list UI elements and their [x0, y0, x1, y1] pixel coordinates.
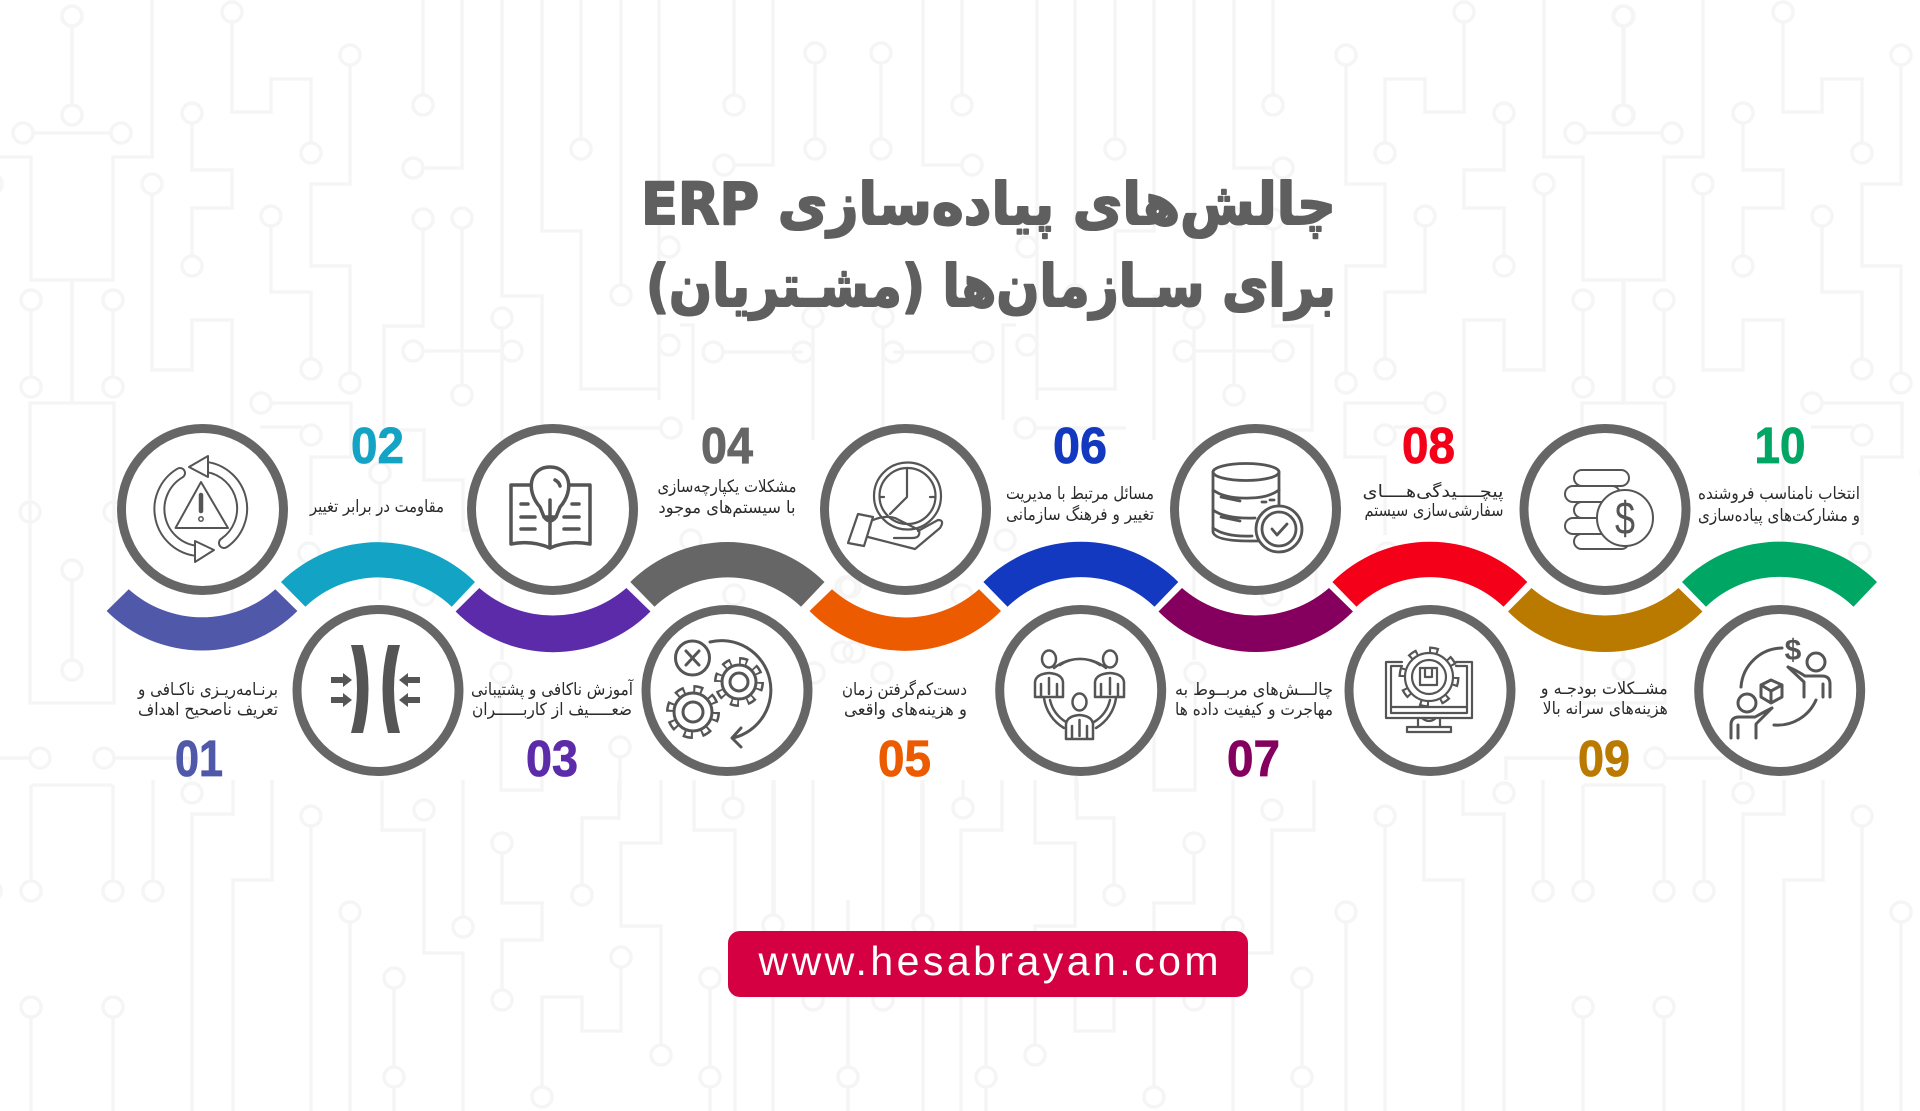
circle 08	[1349, 610, 1511, 772]
number 05: 05	[878, 730, 931, 787]
arc 04	[630, 542, 824, 607]
text 03	[471, 678, 634, 720]
arc 08	[1332, 542, 1527, 607]
text 07: چالـــش‌های مربــوط به	[1175, 680, 1333, 700]
title: برای سـازمان‌ها (مشـتریان)	[646, 252, 1336, 321]
step 01: planning	[107, 428, 297, 787]
number 04: 04	[701, 417, 754, 474]
text 01: برنـامه‌ریـزی ناکـافی و	[137, 680, 278, 700]
arc 03	[456, 588, 650, 652]
number 06: 06	[1053, 417, 1107, 474]
step 03: training	[456, 428, 650, 787]
text 09	[1540, 679, 1668, 719]
text 08: سفارشی‌سازی سیستم	[1364, 501, 1504, 521]
text 01: تعریف ناصحیح اهداف	[138, 700, 278, 720]
arc 06	[983, 542, 1178, 607]
circle 04	[646, 610, 808, 772]
website button: www.hesabrayan.com	[758, 938, 1218, 984]
circle 09	[1524, 428, 1686, 590]
text 05: و هزینه‌های واقعی	[844, 700, 967, 720]
arc 01	[107, 589, 297, 650]
icon: monitor with gear and box	[1386, 651, 1472, 732]
arc 09	[1508, 588, 1702, 652]
text 05: دست‌کم‌گرفتن زمان	[842, 679, 967, 700]
circle 05	[824, 428, 986, 590]
circle 07	[1174, 428, 1336, 590]
number 02: 02	[351, 417, 404, 474]
title	[641, 170, 1336, 321]
text 06: تغییر و فرهنگ سازمانی	[1006, 504, 1154, 525]
step 05: time and cost	[810, 428, 1001, 787]
text 09: مشــکلات بودجـه و	[1540, 679, 1668, 699]
text 04: مشکلات یکپارچه‌سازی	[658, 477, 796, 497]
number 07: 07	[1227, 730, 1280, 787]
number 01: 01	[175, 730, 223, 787]
text 06	[1006, 484, 1154, 525]
step 07: data migration	[1158, 428, 1353, 787]
number 10: 10	[1754, 417, 1806, 474]
number 09: 09	[1578, 730, 1630, 787]
icon: people exchanging box and money	[1731, 648, 1830, 738]
icon: coins with dollar	[1565, 470, 1653, 549]
text 03: ضعـــــیف از کاربــــــران	[472, 700, 632, 720]
text 06: مسائل مرتبط با مدیریت	[1006, 484, 1154, 504]
text 04: با سیستم‌های موجود	[658, 498, 796, 518]
icon glyph: dollar sign: $	[1615, 492, 1635, 544]
icon: book with light bulb	[511, 467, 590, 548]
arc 07	[1158, 588, 1353, 652]
step 02: resistance to change	[281, 417, 475, 772]
icon: warning with cycle arrows	[159, 456, 242, 562]
step 04: integration	[630, 417, 824, 772]
number 08: 08	[1402, 417, 1455, 474]
text 10: و مشارکت‌های پیاده‌سازی	[1698, 506, 1860, 526]
text 10: انتخاب نامناسب فروشنده	[1698, 484, 1860, 504]
icon: three people in a ring	[1035, 650, 1124, 739]
text 01	[137, 680, 278, 720]
circle 02	[297, 610, 459, 772]
text 03: آموزش ناکافی و پشتیبانی	[471, 678, 634, 700]
arc 10	[1682, 542, 1877, 607]
circle 03	[472, 428, 634, 590]
text 07: مهاجرت و کیفیت داده ها	[1175, 700, 1333, 720]
text 09: هزینه‌های سرانه بالا	[1543, 699, 1668, 719]
text 04	[658, 477, 796, 518]
number 03: 03	[526, 730, 578, 787]
circle 06	[1000, 610, 1162, 772]
step 10: vendor selection	[1682, 417, 1877, 772]
icon: database with shield check	[1213, 464, 1302, 552]
text 08: پیچــــیدگی‌هــــای	[1362, 481, 1504, 502]
icon glyph: dollar sign: $	[1785, 634, 1802, 667]
step 08: customization	[1332, 417, 1527, 772]
circle 10	[1699, 610, 1861, 772]
step 06: change management	[983, 417, 1178, 772]
icon: clock on hand	[848, 462, 942, 549]
text 08	[1362, 481, 1504, 521]
arc 02	[281, 542, 475, 607]
arc 05	[810, 589, 1001, 651]
text 10	[1698, 484, 1860, 526]
icon: pressure arcs and arrows	[331, 645, 420, 733]
circle 01	[122, 428, 284, 590]
title: چالش‌های پیاده‌سازی ERP	[641, 170, 1336, 239]
step 09: budget	[1508, 428, 1702, 787]
text 05	[842, 679, 967, 720]
website button	[728, 931, 1248, 997]
text 07	[1175, 680, 1333, 720]
text 02: مقاومت در برابر تغییر	[309, 497, 444, 517]
icon: gears with x and cycle arrow	[671, 641, 771, 747]
